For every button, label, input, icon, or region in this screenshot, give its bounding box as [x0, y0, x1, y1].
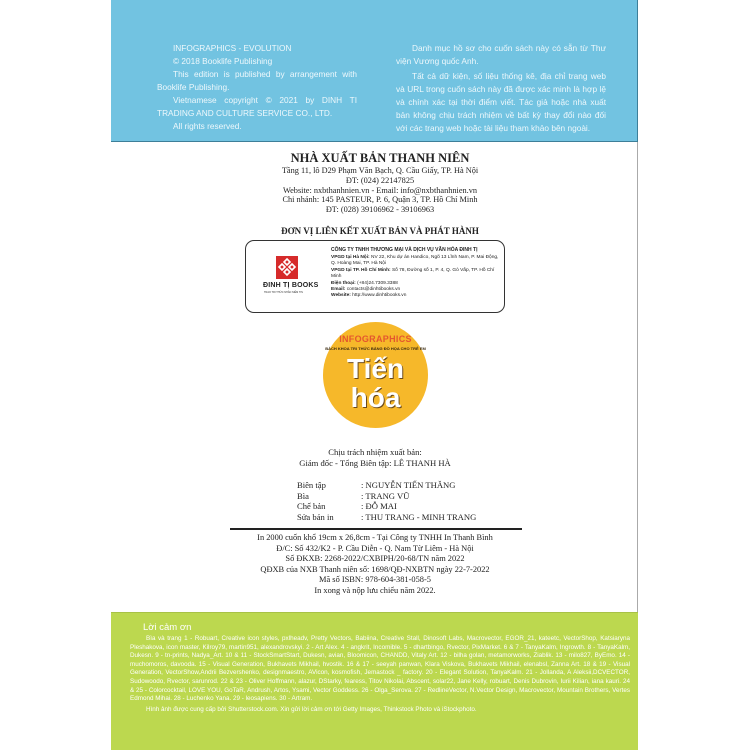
icon: book badge circle — [323, 322, 428, 428]
text block: responsibility: Giám đốc - Tổng Biên tập: LÊ THANH HÀ — [299, 458, 451, 468]
text block: addresses: ĐT: (024) 22147825 — [346, 176, 414, 185]
text block: credits table: : NGUYỄN TIẾN THĂNG — [361, 480, 455, 490]
panel: distributor card: TRAO TRI THỨC NHÂN NIỀM TIN — [264, 291, 303, 294]
text block: english copyright: © 2018 Booklife Publishing — [173, 56, 272, 66]
text block: english copyright: This edition is published by arrangement with Booklife Publishing. — [157, 69, 357, 92]
text block: credits table: : ĐỖ MAI — [361, 501, 397, 511]
text block: printing info: Mã số ISBN: 978-604-381-058-5 — [319, 575, 431, 584]
text block: printing info: Số ĐKXB: 2268-2022/CXBIPH/20-68/TN năm 2022 — [285, 554, 465, 563]
text block: company info: Email: contacts@dinhtibooks.vn — [331, 287, 400, 292]
heading: loi cam on: Lời cảm ơn — [143, 622, 191, 633]
text block: company info: Website: http://www.dinhtibooks.vn — [331, 293, 406, 298]
text: tien hoa: hóa — [351, 382, 400, 413]
text block: credits table: Biên tập — [297, 480, 326, 490]
text block: company info: VPGD tại Hà Nội: NV 22, Khu dự án Handico, Ngõ 13 Lĩnh Nam, P. Mai Động, Q. Hoàng Mai, TP. Hà Nội — [331, 255, 498, 266]
text block: addresses: Tầng 11, lô D29 Phạm Văn Bạch, Q. Cầu Giấy, TP. Hà Nội — [282, 166, 478, 175]
text: dinh ti books: ĐINH TỊ BOOKS — [263, 282, 318, 289]
icon: book badge circle: BÁCH KHOA TRI THỨC BẰNG ĐỒ HỌA CHO TRẺ EM — [325, 346, 426, 351]
text block: printing info — [257, 533, 493, 595]
text block: credits table: Chế bản — [297, 501, 325, 511]
heading: distributor: ĐƠN VỊ LIÊN KẾT XUẤT BẢN VÀ PHÁT HÀNH — [281, 226, 479, 236]
text block: company info: Điện thoại: (+84)24.7309.3388 — [331, 281, 398, 286]
text block: credits: Hình ảnh được cung cấp bởi Shutterstock.com. Xin gửi lời cảm ơn tới Getty Images, Thinkstock Photo và iStockphoto. — [146, 706, 477, 713]
publisher block — [282, 150, 478, 214]
text block: printing info: Đ/C: Số 432/K2 - P. Cầu Diễn - Q. Nam Từ Liêm - Hà Nội — [276, 544, 474, 553]
text: infographics: INFOGRAPHICS — [339, 334, 412, 344]
text block: credits table: : THU TRANG - MINH TRANG — [361, 512, 476, 522]
text block: addresses — [282, 166, 478, 214]
text block: printing info: In 2000 cuốn khổ 19cm x 26,8cm - Tại Công ty TNHH In Thanh Bình — [257, 533, 493, 542]
panel: distributor card — [245, 240, 505, 313]
text block: addresses: Website: nxbthanhnien.vn - Email: info@nxbthanhnien.vn — [283, 186, 477, 195]
text block: credits table — [297, 480, 476, 522]
text block: responsibility: Chịu trách nhiệm xuất bản: — [328, 447, 422, 457]
text block: company info: CÔNG TY TNHH THƯƠNG MẠI VÀ DỊCH VỤ VĂN HÓA ĐINH TỊ — [331, 247, 477, 253]
text block: printing info: QĐXB của NXB Thanh niên số: 1698/QĐ-NXBTN ngày 22-7-2022 — [260, 565, 490, 574]
text block: vietnamese note — [396, 43, 606, 133]
text block: addresses: Chi nhánh: 145 PASTEUR, P. 6, Quận 3, TP. Hồ Chí Minh — [282, 195, 478, 204]
text block: english copyright — [157, 43, 357, 131]
text block: company info — [331, 246, 498, 298]
text block: english copyright: Vietnamese copyright © 2021 by DINH TI TRADING AND CULTURE SERVICE CO., LTD. — [157, 95, 357, 118]
text block: credits table: Sửa bản in — [297, 512, 334, 522]
text block: addresses: ĐT: (028) 39106962 - 39106963 — [326, 205, 434, 214]
panel: acknowledgements green — [111, 612, 638, 750]
text block: vietnamese note: Danh mục hồ sơ cho cuốn sách này có sẵn từ Thư viện Vương quốc Anh. — [396, 43, 606, 66]
text block: english copyright: All rights reserved. — [173, 121, 242, 131]
text block: credits table: : TRANG VŨ — [361, 491, 409, 501]
text block: responsibility — [299, 447, 451, 468]
heading: publisher: NHÀ XUẤT BẢN THANH NIÊN — [291, 151, 469, 165]
text: tien hoa — [347, 353, 404, 413]
text block: printing info: In xong và nộp lưu chiểu năm 2022. — [314, 586, 436, 595]
text block: vietnamese note: Tất cả dữ kiện, số liệu thống kê, địa chỉ trang web và URL trong cuốn sách này đã được xác minh là hợp lệ và chính xác tại thời điểm viết. Tác giả hoặc nhà xuất bản không chịu trách nhiệm về bất kỳ thay đổi nào đối với các trang web hoặc tài liệu tham khảo bên ngoài. — [396, 71, 606, 133]
icon: dinh ti logo — [276, 256, 298, 279]
text block: english copyright: INFOGRAPHICS - EVOLUTION — [173, 43, 291, 53]
text: tien hoa: Tiến — [347, 353, 404, 384]
text block: company info: VPGD tại TP. Hồ Chí Minh: Số 78, Đường số 1, P. 4, Q. Gò Vấp, TP. Hồ Chí Minh — [331, 268, 494, 279]
text block: credits: Bìa và trang 1 - Robuart, Creative icon styles, pxlheadv, Pretty Vectors, Babiina, Creative Stall, Dinosoft Labs, Macrovector, EGOR_21, kateetc, VectorShop, Katsiaryna Pleshakova, icon master, Kilroy79, martin951, alexandrovskyi. 2 - Art Alex. 4 - angkrit, Incomible. 5 - dhartbingo, Rvector, PixMarket. 6 & 7 - TanyaKalm, Ingrowth. 8 - TanyaKalm, Dukesn. 9 - tn-prints, Nadya_Art. 10 & 11 - StockSmartStart, Dukesn, avian, Bloomicon, CHANDD, Vitaly Art. 12 - bilha golan, metamorworks, Ziablik. 13 - milo827, ByEmo. 14 - muchomoros, davooda. 15 - Visual Generation, Bukhavets Mikhail, hvostik. 16 & 17 - seeyah panwan, Klara Viskova, Bukhavets Mikhail, elenabsl, Zanna Art. 18 & 19 - Visual Generation, VectorShow,Andrii Bezvershenko, designmaestro, AVicon, kosmofish, Jemastock _ factory. 20 - Elegant Solution, TanyaKalm. 21 - Jollanda, A Aleksii,DCVECTOR, Sudowoodo, Rvector, sarunrod. 22 & 23 - Oliver Hoffmann, alazur, DStarky, fearess, Titov Nikolai, Abscent, solar22, Jane Kelly, robuart, Denis Dubrovin, Iurii Kilian, iana kauri. 24 & 25 - Colorcocktail, LOVE YOU, GoTaR, Andrush, Artos, Ysami, Vector Goddess. 26 - Olga_Serova. 27 - RedlineVector, N.Vector Design, Macrovector, Mountain Brothers, Vertes Edmond Mihai. 28 - Luchenko Yana. 29 - leosapiens. 30 - Artram. — [130, 635, 630, 702]
text block: credits table: Bìa — [297, 491, 309, 501]
panel: copyright blue — [111, 0, 638, 142]
